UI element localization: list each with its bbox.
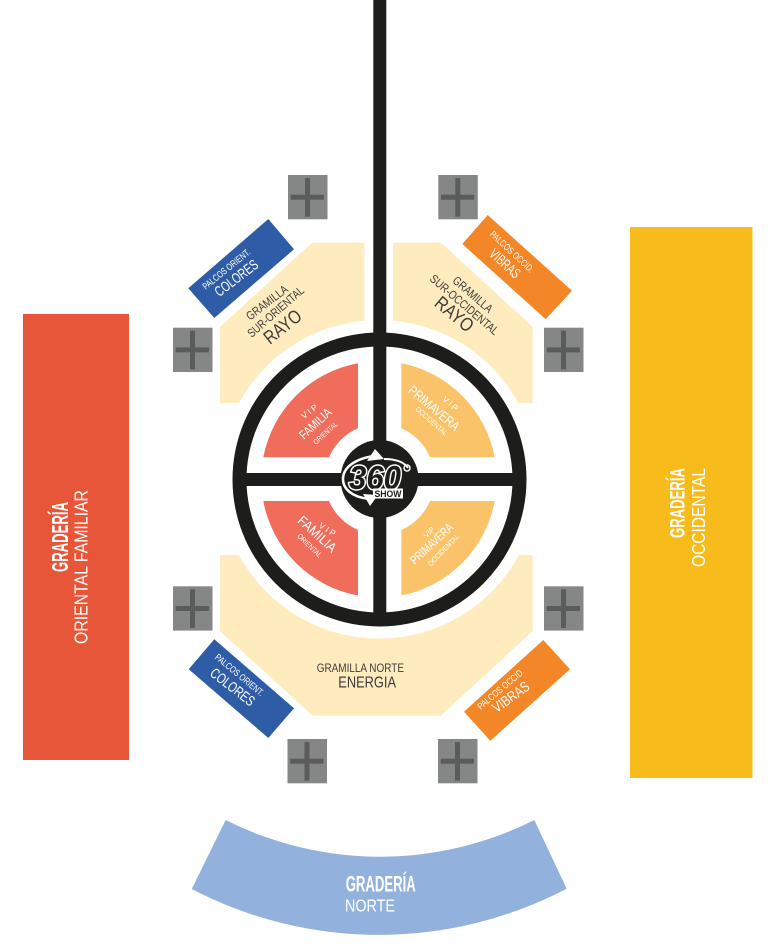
label: familia: FAMILIA (296, 405, 335, 442)
label: oriental: ORIENTAL (295, 532, 324, 560)
label: sur-occidental: SUR-OCCIDENTAL (427, 272, 502, 338)
icon: plus box lower left (173, 586, 212, 631)
heading: gradería norte: GRADERÍA (346, 872, 416, 897)
panel: palcos occid vibras bottom (464, 640, 570, 741)
icon: plus box top right (438, 175, 478, 219)
label: oriental: ORIENTAL (311, 420, 340, 446)
logo: 360 show: SHOW (374, 489, 402, 500)
label: vibras: VIBRAS (490, 679, 533, 717)
label: palcos occid: PALCOS OCCID. (476, 667, 527, 712)
heading: gradería oriental: GRADERÍA (46, 502, 73, 572)
label: primavera: PRIMAVERA (407, 520, 457, 567)
panel: palcos orient colores bottom (189, 639, 294, 738)
panel: gramilla sur-occidental rayo (393, 243, 533, 403)
label: familia: FAMILIA (295, 513, 340, 555)
icon: plus box upper left (173, 328, 212, 372)
label: energia: ENERGIA (338, 674, 397, 691)
label: palcos orient: PALCOS ORIENT. (212, 652, 266, 699)
icon: plus box top left (288, 175, 328, 219)
label: vibras: VIBRAS (486, 246, 523, 282)
panel: gradería occidental (630, 227, 752, 778)
label: gramilla: GRAMILLA (450, 273, 496, 316)
label: gramilla: GRAMILLA (243, 282, 291, 323)
label: vip: VIP (299, 402, 320, 421)
label: occidental: OCCIDENTAL (414, 405, 450, 438)
label: sur-oriental: SUR-ORIENTAL (244, 283, 307, 340)
logo: 360 show: 360 (349, 459, 402, 496)
panel: vip primavera occidental bottom (401, 501, 495, 596)
panel: vip primavera occidental top (401, 363, 495, 457)
label: vip: VIP (317, 520, 338, 539)
panel: palcos orient colores top (188, 219, 294, 318)
icon: plus box bottom right (438, 739, 478, 783)
panel: vip familia oriental bottom (263, 501, 358, 596)
label: colores: COLORES (212, 257, 262, 300)
panel: gradería norte (192, 820, 567, 935)
label: rayo: RAYO (430, 293, 477, 337)
label: occidental: OCCIDENTAL (426, 532, 461, 568)
label: norte: NORTE (345, 896, 395, 916)
label: vip: VIP (422, 525, 437, 540)
label: primavera: PRIMAVERA (405, 383, 463, 434)
stage: circular walkway and runway (240, 0, 520, 620)
label: colores: COLORES (207, 666, 257, 710)
label: palcos orient: PALCOS ORIENT. (201, 247, 253, 292)
panel: gramilla norte energia (220, 555, 533, 716)
label: oriental familiar: ORIENTAL FAMILIAR (71, 490, 91, 644)
icon: plus box bottom left (288, 739, 327, 783)
heading: gradería occidental: GRADERÍA (666, 468, 689, 538)
label: vip: VIP (440, 394, 461, 413)
label: rayo: RAYO (260, 306, 306, 349)
panel: gramilla sur-oriental rayo (220, 243, 364, 403)
label: gramilla norte: GRAMILLA NORTE (317, 661, 404, 675)
panel: palcos occid vibras top (462, 215, 572, 319)
panel: vip familia oriental top (263, 363, 358, 457)
icon: plus box upper right (544, 328, 584, 372)
icon: plus box lower right (544, 586, 584, 631)
logo: 360 show (340, 440, 418, 518)
panel: gradería oriental familiar (23, 314, 129, 760)
label: occidental: OCCIDENTAL (689, 468, 709, 567)
label: palcos occid: PALCOS OCCID. (487, 229, 536, 275)
